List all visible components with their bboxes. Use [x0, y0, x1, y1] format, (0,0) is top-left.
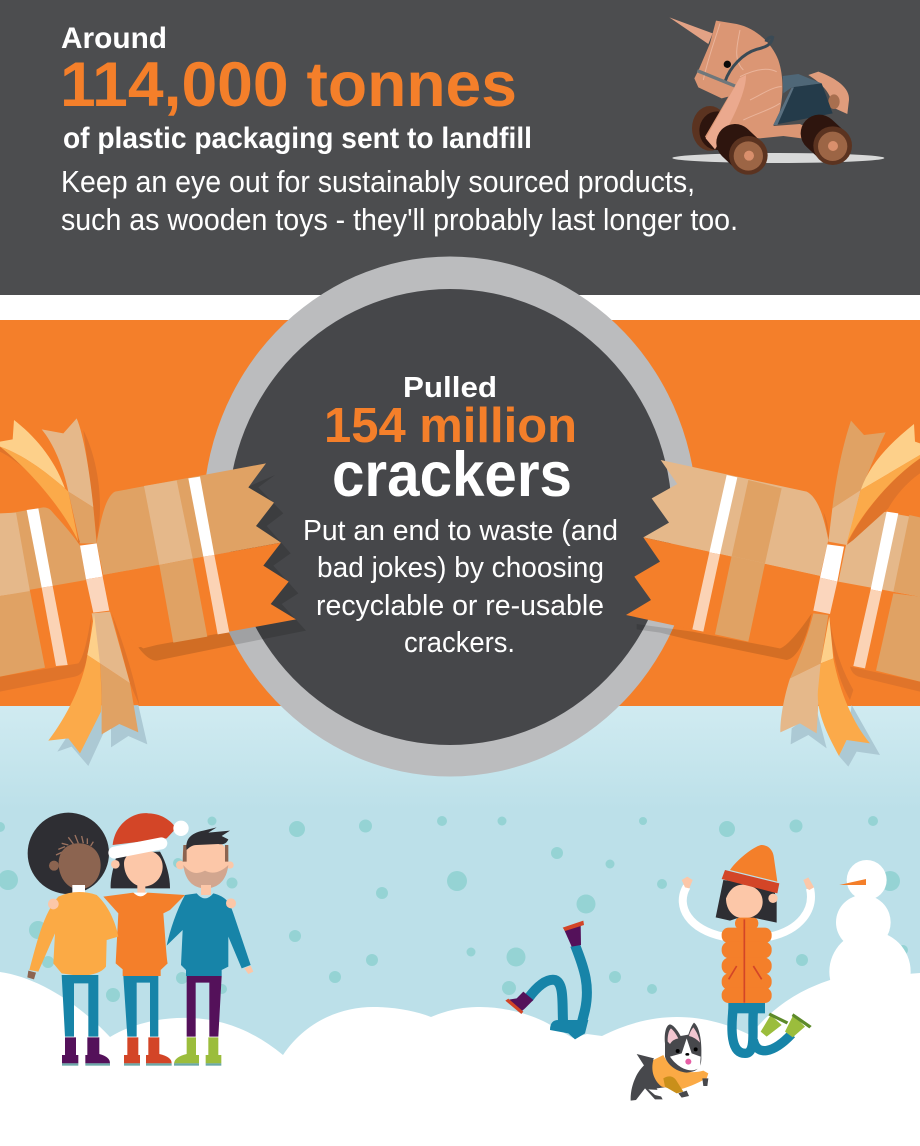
- person: beard, blue sweater: [167, 827, 253, 1066]
- panel: white separator band: [0, 295, 920, 320]
- shadow: far end: [850, 667, 920, 692]
- lower ribbons: [48, 612, 139, 753]
- cracker knot: [813, 544, 844, 614]
- santa hat: [113, 813, 189, 853]
- saddle blanket: [773, 74, 833, 125]
- panel: plastic packaging background: [0, 0, 920, 295]
- cracker right end: [838, 511, 920, 682]
- panel: winter sky: [0, 706, 920, 810]
- lower ribbon shadows: [791, 705, 880, 767]
- text block: cracker advice: Put an end to waste (and: [303, 515, 618, 547]
- heading: 154 million: 154 million: [324, 399, 577, 453]
- eye: [724, 61, 731, 68]
- upper ribbons: [828, 421, 920, 545]
- person: orange sweater body: [103, 850, 185, 1066]
- lower ribbons: [780, 613, 870, 756]
- shadow: knot side: [820, 507, 829, 542]
- illustration: group of three friends: [27, 813, 253, 1066]
- cracker left end: [0, 507, 86, 677]
- snowman: [829, 860, 911, 1012]
- back wheel: [692, 106, 735, 151]
- snow dots: [0, 816, 908, 1002]
- front leg: [706, 75, 746, 149]
- panel: orange cracker band: [0, 320, 920, 706]
- heading: crackers: crackers: [332, 440, 572, 510]
- person: upside-down legs in snow: [505, 921, 588, 1039]
- text block: wooden toys advice: Keep an eye out for sustainably sourced products,: [61, 164, 695, 199]
- cracker right half: [97, 463, 296, 648]
- heading: Around: Around: [61, 22, 167, 55]
- tail: [808, 72, 849, 114]
- shadow: lower edge of cracker: [0, 613, 92, 692]
- lower ribbon shadows: [57, 705, 147, 766]
- text block: wooden toys advice: such as wooden toys - they'll probably last longer too.: [61, 202, 738, 237]
- front wheel: [729, 136, 768, 175]
- toy shadow: [672, 153, 884, 163]
- text block: cracker advice: bad jokes) by choosing: [317, 552, 604, 584]
- person: afro hair, yellow sweater: [27, 813, 118, 1066]
- wood grain: [703, 23, 782, 120]
- illustration: right cracker: [626, 421, 920, 767]
- cracker shadows: [138, 475, 306, 661]
- text block: cracker advice: recyclable or re-usable: [316, 590, 604, 622]
- illustration: left cracker: [0, 418, 306, 766]
- text block: wooden toys advice: [61, 164, 738, 237]
- snow ground: [0, 972, 920, 1146]
- cracker left half: [626, 460, 828, 648]
- body: [694, 21, 808, 143]
- illustration: legs sticking out of snow, girl, dog, snowman: [505, 845, 911, 1101]
- cracker knot: [80, 543, 109, 613]
- bridle: [697, 37, 773, 86]
- cracker shadows: [637, 613, 812, 660]
- circle inner panel: [228, 289, 672, 745]
- circle outer ring: [203, 256, 697, 776]
- horn: [669, 17, 713, 44]
- person: jumping girl in orange jacket: [682, 845, 814, 1053]
- panel: lower sky: [0, 810, 920, 1146]
- upper ribbons: [0, 418, 100, 543]
- rear wheel: [813, 126, 852, 165]
- subheading: plastic packaging: of plastic packaging sent to landfill: [63, 122, 532, 155]
- dog in yellow coat: [631, 1023, 708, 1101]
- heading: 114,000 tonnes: 114,000 tonnes: [60, 50, 517, 120]
- heading: Pulled: Pulled: [403, 372, 497, 404]
- text block: cracker advice: [303, 515, 618, 659]
- icon: wooden toy unicorn: [669, 17, 884, 175]
- text block: cracker advice: crackers.: [404, 627, 515, 659]
